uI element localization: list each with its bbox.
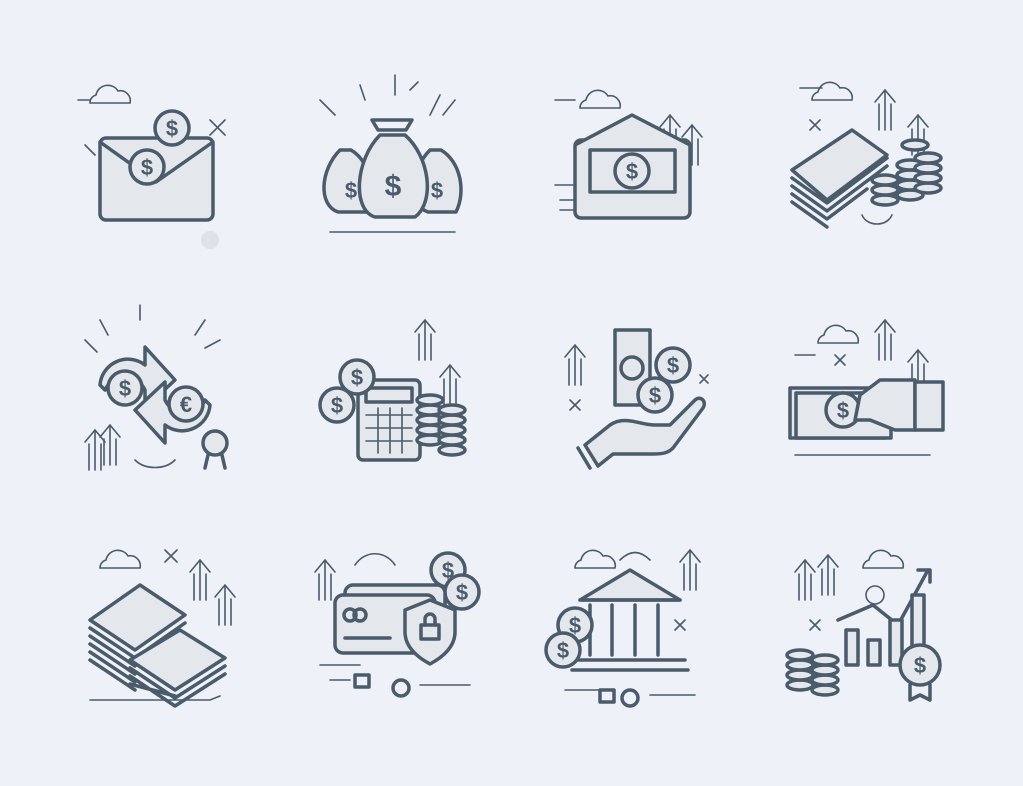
icon: money bags: $: [345, 178, 357, 203]
icon: credit card and shield: [315, 553, 479, 696]
icon: calculator with coins: [320, 320, 465, 460]
icon: money bags: [320, 75, 461, 232]
icon: growth chart: $: [914, 653, 926, 678]
icon: growth chart: [787, 550, 940, 700]
icon: stacks of cash: [90, 550, 235, 706]
icon: currency exchange: [85, 305, 227, 470]
icon: cash and coins: [792, 82, 941, 227]
icon: money bags: $: [431, 178, 443, 203]
icon: envelope with bill: [555, 90, 702, 218]
icon: envelope with coins: [78, 85, 225, 249]
icon: bank: [546, 550, 700, 706]
icon: hand receiving money: [565, 330, 708, 468]
icon: hand giving cash: [790, 320, 943, 455]
icon: money bags: $: [385, 170, 402, 203]
icon: currency exchange: €: [180, 392, 192, 417]
